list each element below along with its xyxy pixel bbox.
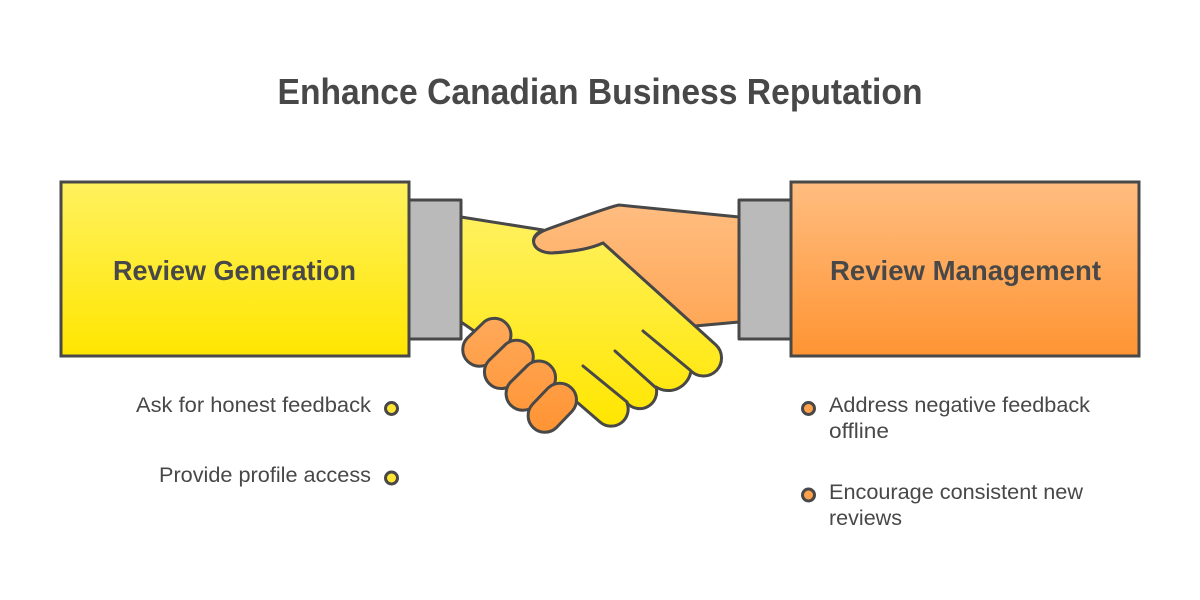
title: Enhance Canadian Business Reputation [278,71,922,112]
bullet dot [802,402,814,414]
orange hand [534,205,739,326]
bullet text [829,481,1084,530]
heading: review generation: Review Generation [113,255,356,286]
yellow hand [461,217,722,426]
list: review management points [802,394,1091,530]
finger lines [583,331,690,402]
orange fingers [463,318,577,432]
bullet text: Ask for honest feedback [136,394,372,417]
bullet text [829,394,1091,443]
bullet text: Provide profile access [159,464,371,487]
cuff: left [409,200,461,339]
panel: review generation [61,182,409,356]
bullet dot [802,489,814,501]
panel: review management [791,182,1139,356]
bullet text: reviews [829,507,902,530]
bullet dot [386,472,398,484]
heading: review management: Review Management [830,255,1101,286]
bullet text: Encourage consistent new [829,481,1084,504]
bullet text: Address negative feedback [829,394,1091,417]
cuff: right [739,200,791,339]
bullet text: offline [829,420,889,443]
bullet dot [386,402,398,414]
icon: handshake [409,200,791,432]
list: review generation points [136,394,398,487]
